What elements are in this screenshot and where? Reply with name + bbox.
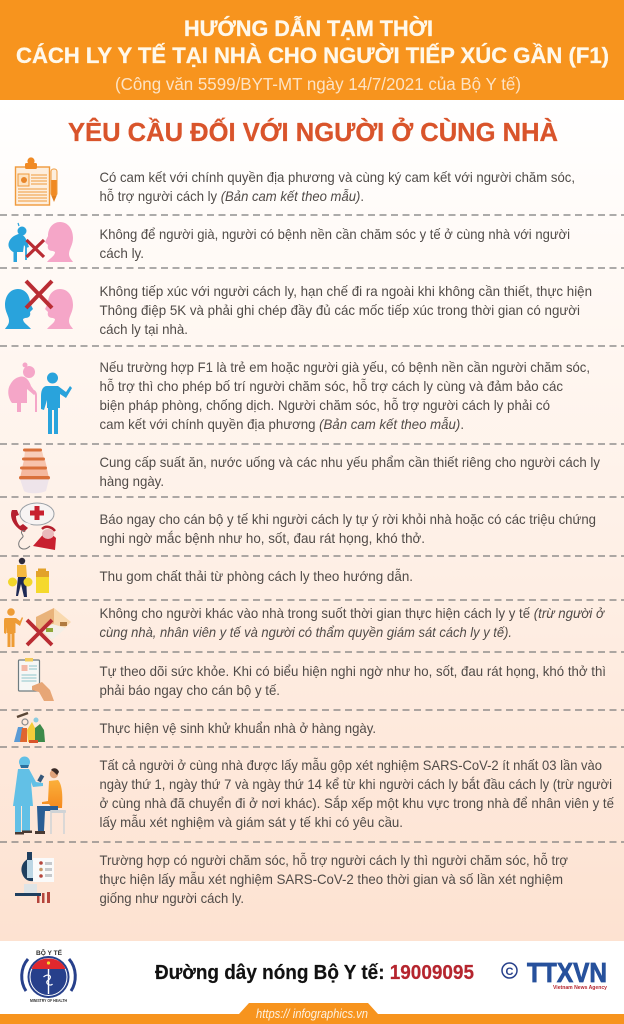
text block 5 bbox=[100, 454, 600, 489]
logo: TTXVN: TTXVN bbox=[527, 957, 607, 988]
text block 2 bbox=[100, 226, 570, 261]
text block 8 bbox=[100, 605, 605, 640]
text block 4: hỗ trợ thì cho phép bố trí người chăm sóc, hỗ trợ cách ly cùng và đảm bảo các bbox=[100, 378, 563, 394]
website tab: https:// infographics.vn bbox=[256, 1006, 368, 1021]
text block 3: Thông điệp 5K và phải ghi chép đầy đủ các mốc tiếp xúc trong thời gian có người bbox=[100, 302, 580, 318]
icon: elderly person and head with cross bbox=[8, 222, 73, 262]
text block 11: lấy mẫu xét nghiệm và giám sát y tế khi có yêu cầu. bbox=[100, 814, 403, 830]
text block 6 bbox=[100, 511, 596, 546]
text block 5: Cung cấp suất ăn, nước uống và các nhu yếu phẩm cần thiết riêng cho người cách ly bbox=[100, 454, 600, 470]
icon: health record and hand bbox=[18, 658, 54, 701]
text block 4 bbox=[100, 359, 590, 432]
text block 3: cách ly tại nhà. bbox=[100, 321, 188, 337]
text block 3 bbox=[100, 283, 592, 337]
text block 4: Nếu trường hợp F1 là trẻ em hoặc người già yếu, có bệnh nền cần người chăm sóc, bbox=[100, 359, 590, 375]
subtitle: (Công văn 5599/BYT-MT ngày 14/7/2021 của Bộ Y tế) bbox=[115, 74, 521, 94]
website tab bbox=[0, 1003, 624, 1024]
text block 12: thực hiện lấy mẫu xét nghiệm SARS-CoV-2 theo thời gian và số lần xét nghiệm bbox=[100, 871, 563, 887]
text block 12 bbox=[100, 852, 568, 906]
logo: Ministry of Health: MINISTRY OF HEALTH bbox=[30, 998, 67, 1003]
icon: cleaning supplies bbox=[14, 713, 45, 743]
logo: TTXVN: C bbox=[506, 966, 514, 978]
text block 8: Không cho người khác vào nhà trong suốt thời gian thực hiện cách ly y tế (trừ người ở bbox=[100, 605, 605, 621]
hotline: Đường dây nóng Bộ Y tế: 19009095 bbox=[155, 962, 474, 984]
logo: Ministry of Health bbox=[22, 949, 75, 1003]
title line 2: CÁCH LY Y TẾ TẠI NHÀ CHO NGƯỜI TIẾP XÚC GẦN (F1) bbox=[16, 43, 609, 68]
logo: TTXVN: Vietnam News Agency bbox=[553, 985, 608, 991]
icon: elderly person with cane and caregiver bbox=[8, 362, 72, 434]
text block 8: cùng nhà, nhân viên y tế và người có thẩm quyền giám sát cách ly y tế). bbox=[100, 624, 512, 640]
text block 11 bbox=[100, 757, 614, 830]
section heading: YÊU CẦU ĐỐI VỚI NGƯỜI Ở CÙNG NHÀ bbox=[68, 116, 558, 147]
text block 1 bbox=[100, 169, 575, 204]
text block 5: hàng ngày. bbox=[100, 473, 164, 489]
icon: clipboard and pen bbox=[16, 157, 57, 205]
logo: Ministry of Health: BỘ Y TẾ bbox=[36, 949, 62, 957]
footer panel bbox=[0, 941, 624, 1024]
text block 6: Báo ngay cho cán bộ y tế khi người cách ly tự ý rời khỏi nhà hoặc có các triệu chứng bbox=[100, 511, 596, 527]
text block 1: hỗ trợ người cách ly (Bản cam kết theo mẫu). bbox=[100, 188, 364, 204]
text block 6: nghi ngờ mắc bệnh như ho, sốt, đau rát họng, khó thở. bbox=[100, 530, 425, 546]
text block 2: Không để người già, người có bệnh nền cần chăm sóc y tế ở cùng nhà với người bbox=[100, 226, 570, 242]
text block 4: cam kết với chính quyền địa phương (Bản cam kết theo mẫu). bbox=[100, 416, 464, 432]
text block 9: phải báo ngay cho cán bộ y tế. bbox=[100, 682, 280, 698]
text block 1: Có cam kết với chính quyền địa phương và cùng ký cam kết với người chăm sóc, bbox=[100, 169, 575, 185]
icon: medical worker sampling patient bbox=[13, 756, 66, 834]
icon: two heads with cross bbox=[5, 281, 73, 329]
icon: microscope and chart bbox=[15, 852, 54, 903]
header banner bbox=[0, 0, 624, 100]
icon: phone and medical cross bubble bbox=[11, 503, 56, 550]
text block 10: Thực hiện vệ sinh khử khuẩn nhà ở hàng ngày. bbox=[100, 720, 376, 736]
text block 3: Không tiếp xúc với người cách ly, hạn chế đi ra ngoài khi không cần thiết, thực hiện bbox=[100, 283, 592, 299]
logo: TTXVN bbox=[502, 957, 608, 991]
text block 9: Tự theo dõi sức khỏe. Khi có biểu hiện nghi ngờ như ho, sốt, đau rát họng, khó thở thì bbox=[100, 663, 606, 679]
text block 4: biện pháp phòng, chống dịch. Người chăm sóc, hỗ trợ người cách ly phải có bbox=[100, 397, 550, 413]
text block 12: Trường hợp có người chăm sóc, hỗ trợ người cách ly thì người chăm sóc, hỗ trợ bbox=[100, 852, 568, 868]
text block 12: giống như người cách ly. bbox=[100, 890, 244, 906]
icon: food containers bbox=[19, 448, 50, 493]
icon: person and crossed room bbox=[4, 608, 71, 647]
text block 9 bbox=[100, 663, 606, 698]
icon: waste collection bbox=[8, 558, 49, 597]
text block 7: Thu gom chất thải từ phòng cách ly theo hướng dẫn. bbox=[100, 568, 413, 584]
text block 2: cách ly. bbox=[100, 245, 144, 261]
title line 1: HƯỚNG DẪN TẠM THỜI bbox=[184, 15, 433, 41]
